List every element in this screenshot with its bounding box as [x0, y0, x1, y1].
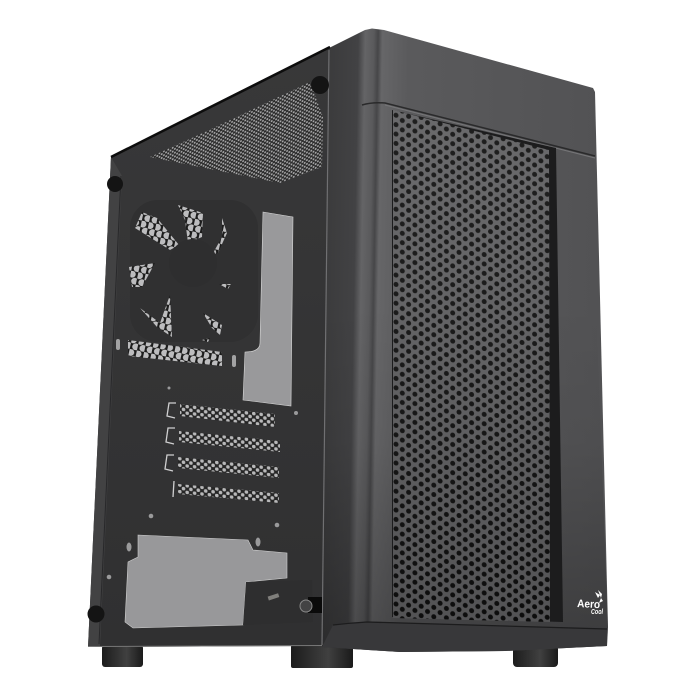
recessed mesh background — [392, 110, 563, 622]
fan blade gaps with honeycomb — [129, 205, 231, 342]
mounting holes — [107, 386, 298, 579]
panel: tempered glass side — [88, 47, 330, 647]
glass right edge — [322, 50, 329, 645]
foot: left — [102, 645, 143, 667]
panel: front of case — [322, 28, 608, 652]
seam highlight — [385, 105, 595, 158]
front shell — [322, 28, 608, 652]
foot: right — [513, 645, 558, 667]
logo: AeroCool: Aero — [577, 598, 601, 611]
seam between top cap and front — [362, 103, 595, 156]
expansion slot vents — [178, 404, 280, 503]
rubber feet — [102, 645, 558, 668]
thumbscrews — [88, 76, 329, 622]
thumbscrew: top left — [107, 176, 123, 192]
lower shading — [322, 300, 608, 652]
bottom screw bracket — [243, 580, 313, 625]
power supply cut-out — [125, 535, 287, 628]
left glass edge tint — [88, 157, 122, 647]
expansion slot brackets — [165, 403, 176, 497]
fan frame — [130, 200, 258, 342]
glass pane — [88, 47, 330, 647]
perforated mesh — [393, 110, 550, 622]
glass bottom edge — [88, 646, 322, 647]
inner frame line — [99, 176, 121, 644]
fan hub — [169, 239, 217, 287]
logo: AeroCool: Cool — [591, 607, 604, 616]
bracket tab — [268, 593, 279, 600]
thumbscrew: bottom left — [88, 606, 104, 622]
foot: centre — [291, 645, 353, 668]
fan — [129, 200, 258, 342]
bottom band edge — [333, 622, 607, 629]
mesh tone overlay — [393, 110, 550, 622]
top ventilation mesh — [150, 82, 323, 183]
logo: AeroCool — [577, 590, 604, 616]
vent row under fan — [128, 340, 222, 366]
bottom band — [322, 622, 607, 652]
thumbscrew: top right — [311, 76, 329, 94]
rear cut-out — [243, 212, 293, 406]
thumbscrew: bottom right — [300, 597, 322, 613]
glass top edge — [111, 47, 330, 157]
vent slots — [116, 339, 236, 367]
